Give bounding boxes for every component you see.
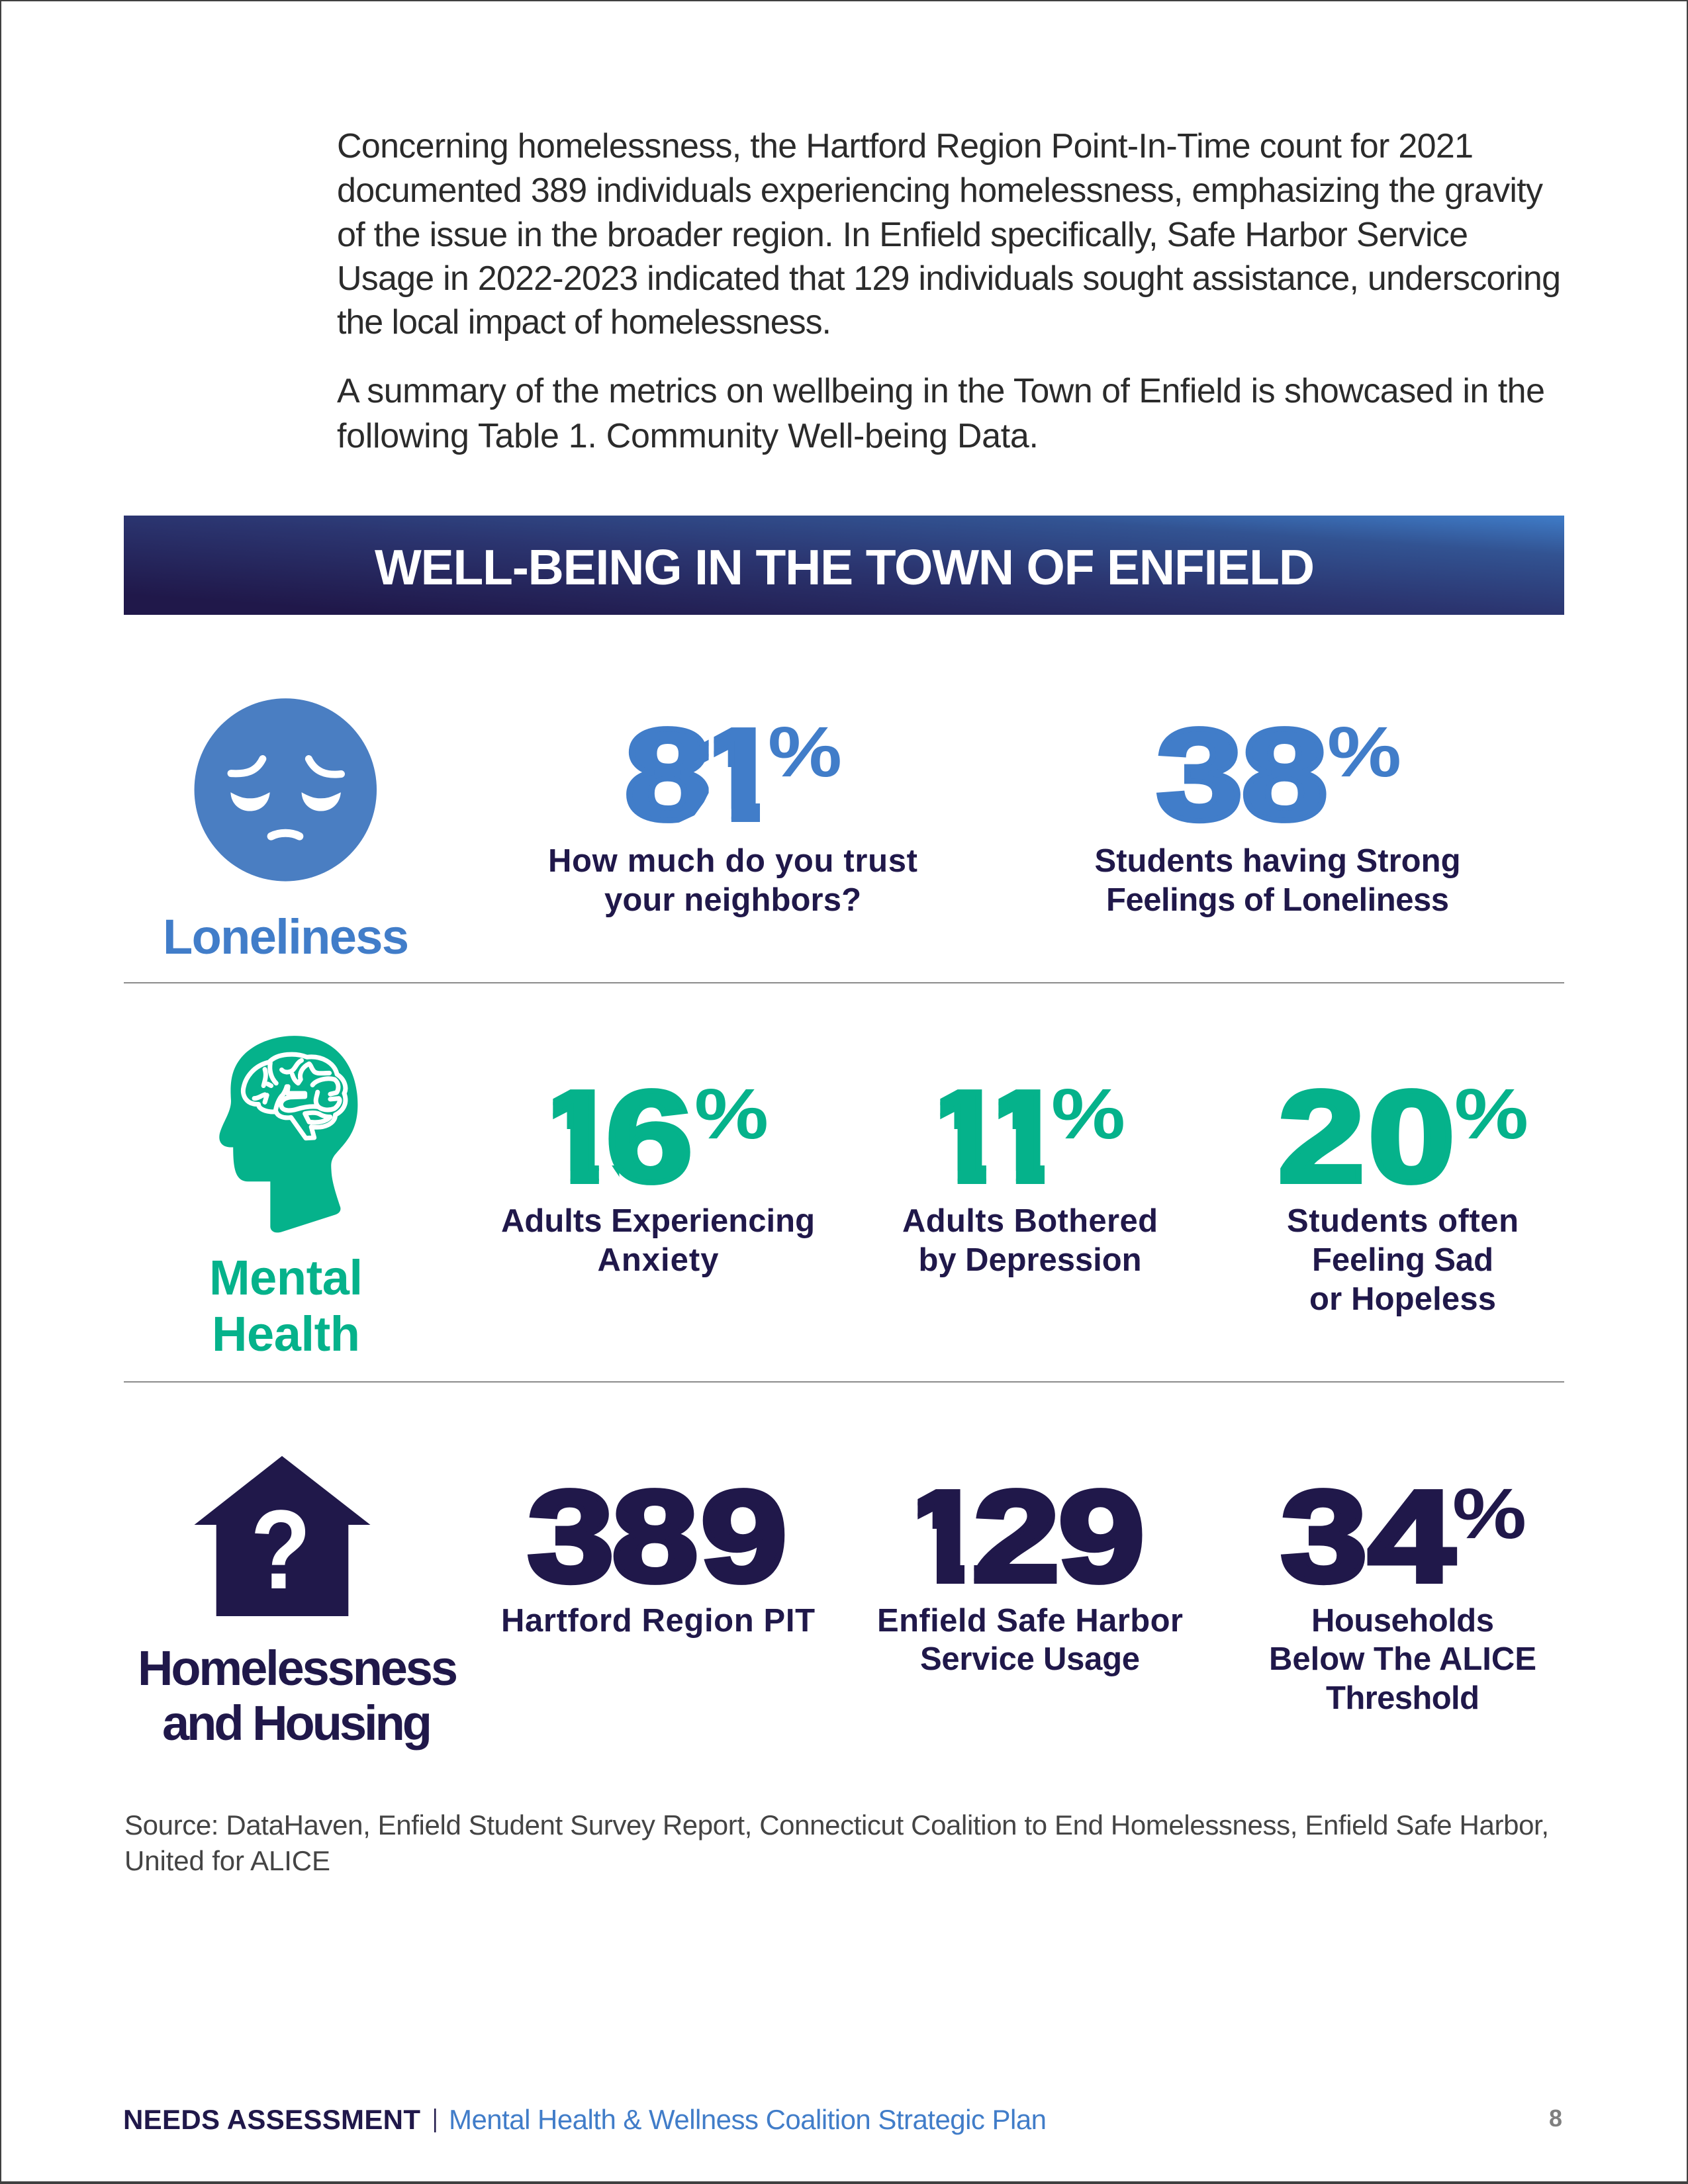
text block: homelessness introduction: of the issue in the broader region. In Enfield specifically, Safe Harbor Service xyxy=(337,216,1468,254)
text block: source note: Source: DataHaven, Enfield Student Survey Report, Connecticut Coalition to End Homelessness, Enfield Safe Harbor, xyxy=(124,1809,1549,1841)
stat: 81 percent: your neighbors? xyxy=(604,882,861,918)
stat: 16 percent: Adults Experiencing xyxy=(501,1203,815,1239)
text block: homelessness introduction: Usage in 2022-2023 indicated that 129 individuals sought assistance, underscoring xyxy=(337,259,1561,298)
stat: 129 xyxy=(879,1488,1182,1676)
stat: 81 percent: 81 xyxy=(624,702,781,847)
stat: 20 percent: or Hopeless xyxy=(1309,1281,1496,1317)
stat: 38 percent: Students having Strong xyxy=(1095,843,1460,879)
panel: homelessness and housing xyxy=(138,1456,1536,1751)
stat: 129: Service Usage xyxy=(920,1641,1140,1677)
stat: 34 percent: % xyxy=(1452,1473,1526,1553)
stat: 81 percent: % xyxy=(768,711,842,792)
stat: 34 percent: Below The ALICE xyxy=(1269,1641,1536,1677)
stat: 20 percent: Feeling Sad xyxy=(1312,1242,1493,1278)
text block: summary of metrics: A summary of the metrics on wellbeing in the Town of Enfield is showcased in the xyxy=(337,372,1545,410)
stat: 11 percent: by Depression xyxy=(919,1242,1141,1278)
stat: 11 percent xyxy=(903,1089,1156,1277)
heading: homelessness and housing xyxy=(138,1641,458,1751)
stat: 20 percent: Students often xyxy=(1287,1203,1519,1239)
heading: homelessness and housing: and Housing xyxy=(162,1696,432,1751)
stat: 34 percent: Households xyxy=(1311,1603,1494,1639)
icon: house with question mark xyxy=(195,1456,371,1616)
footer: NEEDS ASSESSMENT xyxy=(123,2104,420,2135)
text block: homelessness introduction: Concerning homelessness, the Hartford Region Point-In-Time count for 2021 xyxy=(337,127,1474,165)
stat: 16 percent: Anxiety xyxy=(597,1242,719,1278)
stat: 16 percent: % xyxy=(694,1073,769,1154)
icon: house with question mark: ? xyxy=(250,1486,311,1612)
stat: 389: 389 xyxy=(528,1464,787,1609)
panel: mental health xyxy=(209,1036,1528,1361)
stat: 20 percent: % xyxy=(1454,1073,1528,1154)
stat: 38 percent xyxy=(1095,702,1460,918)
footer xyxy=(123,2104,1562,2135)
stat: 11 percent: % xyxy=(1051,1073,1125,1154)
stat: 81 percent: How much do you trust xyxy=(548,843,917,879)
text block: homelessness introduction xyxy=(337,127,1561,341)
icon: head with brain xyxy=(219,1036,357,1232)
stat: 11 percent: Adults Bothered xyxy=(902,1203,1158,1239)
icon: sad face xyxy=(195,698,377,882)
stat: 16 percent: 16 xyxy=(534,1064,692,1209)
stat: 129: Enfield Safe Harbor xyxy=(877,1603,1183,1639)
text block: summary of metrics xyxy=(337,372,1545,455)
stat: 129: 129 xyxy=(900,1464,1145,1609)
stat: 20 percent xyxy=(1278,1064,1528,1317)
stat: 34 percent xyxy=(1269,1464,1536,1716)
panel: loneliness xyxy=(163,698,1460,964)
banner: well-being heading xyxy=(124,516,1564,615)
stat: 34 percent: Threshold xyxy=(1326,1680,1479,1716)
text block: homelessness introduction: the local impact of homelessness. xyxy=(337,303,831,341)
stat: 389 xyxy=(501,1464,815,1639)
text block: homelessness introduction: documented 389 individuals experiencing homelessness, emphasizing the gravity xyxy=(337,171,1543,210)
stat: 81 percent xyxy=(550,726,917,917)
text block: source note xyxy=(124,1809,1549,1876)
stat: 11 percent: 11 xyxy=(921,1064,1066,1209)
heading: loneliness: Loneliness xyxy=(163,909,409,964)
text block: source note: United for ALICE xyxy=(124,1845,330,1876)
stat: 38 percent: % xyxy=(1327,711,1401,792)
footer: Mental Health & Wellness Coalition Strategic Plan xyxy=(449,2104,1047,2135)
page number: 8 xyxy=(1549,2105,1562,2132)
stat: 38 percent: Feelings of Loneliness xyxy=(1106,882,1449,918)
stat: 389: Hartford Region PIT xyxy=(501,1603,815,1639)
heading: mental health: Mental xyxy=(209,1250,363,1305)
heading: homelessness and housing: Homelessness xyxy=(138,1641,458,1696)
stat: 38 percent: 38 xyxy=(1156,702,1328,847)
heading: mental health xyxy=(209,1250,363,1361)
stat: 20 percent: 20 xyxy=(1278,1064,1455,1209)
title: WELL-BEING IN THE TOWN OF ENFIELD xyxy=(375,539,1315,595)
heading: mental health: Health xyxy=(212,1306,360,1361)
text block: summary of metrics: following Table 1. Community Well-being Data. xyxy=(337,417,1039,455)
stat: 34 percent: 34 xyxy=(1281,1464,1455,1609)
stat: 16 percent xyxy=(502,1088,813,1277)
